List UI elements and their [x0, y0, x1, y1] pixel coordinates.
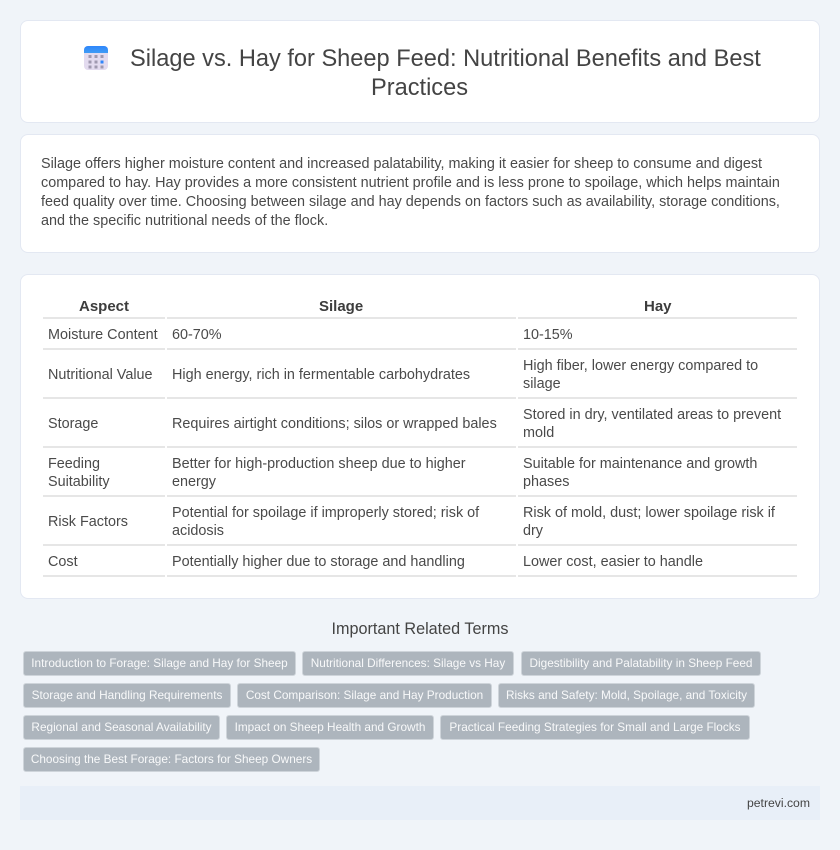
- footer source: petrevi.com: [747, 796, 810, 810]
- comparison table: Suitability: [48, 474, 110, 490]
- comparison table: Requires airtight conditions; silos or wrapped bales: [172, 416, 497, 432]
- related term tags: Impact on Sheep Health and Growth: [235, 720, 425, 734]
- comparison table: Feeding: [48, 456, 100, 472]
- related term tags: Risks and Safety: Mold, Spoilage, and Toxicity: [506, 688, 747, 702]
- comparison table: Potentially higher due to storage and handling: [172, 554, 465, 570]
- intro text: Silage offers higher moisture content and increased palatability, making it easier for sheep to consume and digest: [41, 156, 762, 172]
- comparison table: Lower cost, easier to handle: [523, 554, 703, 570]
- comparison table: dry: [523, 523, 543, 539]
- intro text: and the specific nutritional needs of the flock.: [41, 213, 328, 229]
- related term tags: Regional and Seasonal Availability: [31, 720, 212, 734]
- related term tags: Nutritional Differences: Silage vs Hay: [311, 656, 505, 670]
- intro panel: [20, 134, 820, 253]
- comparison table: Suitable for maintenance and growth: [523, 456, 757, 472]
- comparison table: Stored in dry, ventilated areas to prevent: [523, 407, 781, 423]
- comparison table: Potential for spoilage if improperly stored; risk of: [172, 505, 479, 521]
- intro text: feed quality over time. Choosing between silage and hay depends on factors such as availability, storage conditions,: [41, 194, 780, 210]
- comparison table: acidosis: [172, 523, 224, 539]
- related term tags: Cost Comparison: Silage and Hay Production: [246, 688, 483, 702]
- table panel: [20, 274, 820, 599]
- related term tags: Choosing the Best Forage: Factors for Sheep Owners: [31, 752, 312, 766]
- intro text: compared to hay. Hay provides a more consistent nutrient profile and is less prone to spoilage, which helps maintain: [41, 175, 780, 191]
- comparison table: 10-15%: [523, 327, 573, 343]
- comparison table: Better for high-production sheep due to higher: [172, 456, 466, 472]
- comparison table: Aspect: [79, 298, 129, 315]
- comparison table: Risk of mold, dust; lower spoilage risk if: [523, 505, 775, 521]
- comparison table: energy: [172, 474, 216, 490]
- comparison table: silage: [523, 376, 561, 392]
- header card: [20, 20, 820, 123]
- comparison table: Storage: [48, 416, 98, 432]
- comparison table: Silage: [319, 298, 363, 315]
- icon: calendar: [84, 46, 108, 70]
- intro text: [41, 156, 780, 229]
- comparison table: High energy, rich in fermentable carbohydrates: [172, 367, 470, 383]
- comparison table: phases: [523, 474, 569, 490]
- comparison table: Risk Factors: [48, 514, 128, 530]
- related term tags: Storage and Handling Requirements: [32, 688, 222, 702]
- comparison table: Cost: [48, 554, 78, 570]
- comparison table: Hay: [644, 298, 672, 315]
- comparison table: High fiber, lower energy compared to: [523, 358, 758, 374]
- comparison table: [43, 298, 797, 577]
- comparison table: Moisture Content: [48, 327, 158, 343]
- related term tags: [23, 651, 761, 772]
- comparison table: Nutritional Value: [48, 367, 153, 383]
- title: Practices: [371, 75, 468, 101]
- related term tags: Digestibility and Palatability in Sheep Feed: [530, 656, 752, 670]
- footer bar: [20, 786, 820, 820]
- comparison table: mold: [523, 425, 554, 441]
- related terms heading: Important Related Terms: [332, 620, 508, 638]
- related term tags: Introduction to Forage: Silage and Hay for Sheep: [31, 656, 288, 670]
- title: Silage vs. Hay for Sheep Feed: Nutritional Benefits and Best: [130, 46, 761, 72]
- comparison table: 60-70%: [172, 327, 222, 343]
- related term tags: Practical Feeding Strategies for Small and Large Flocks: [449, 720, 741, 734]
- title: [130, 46, 761, 101]
